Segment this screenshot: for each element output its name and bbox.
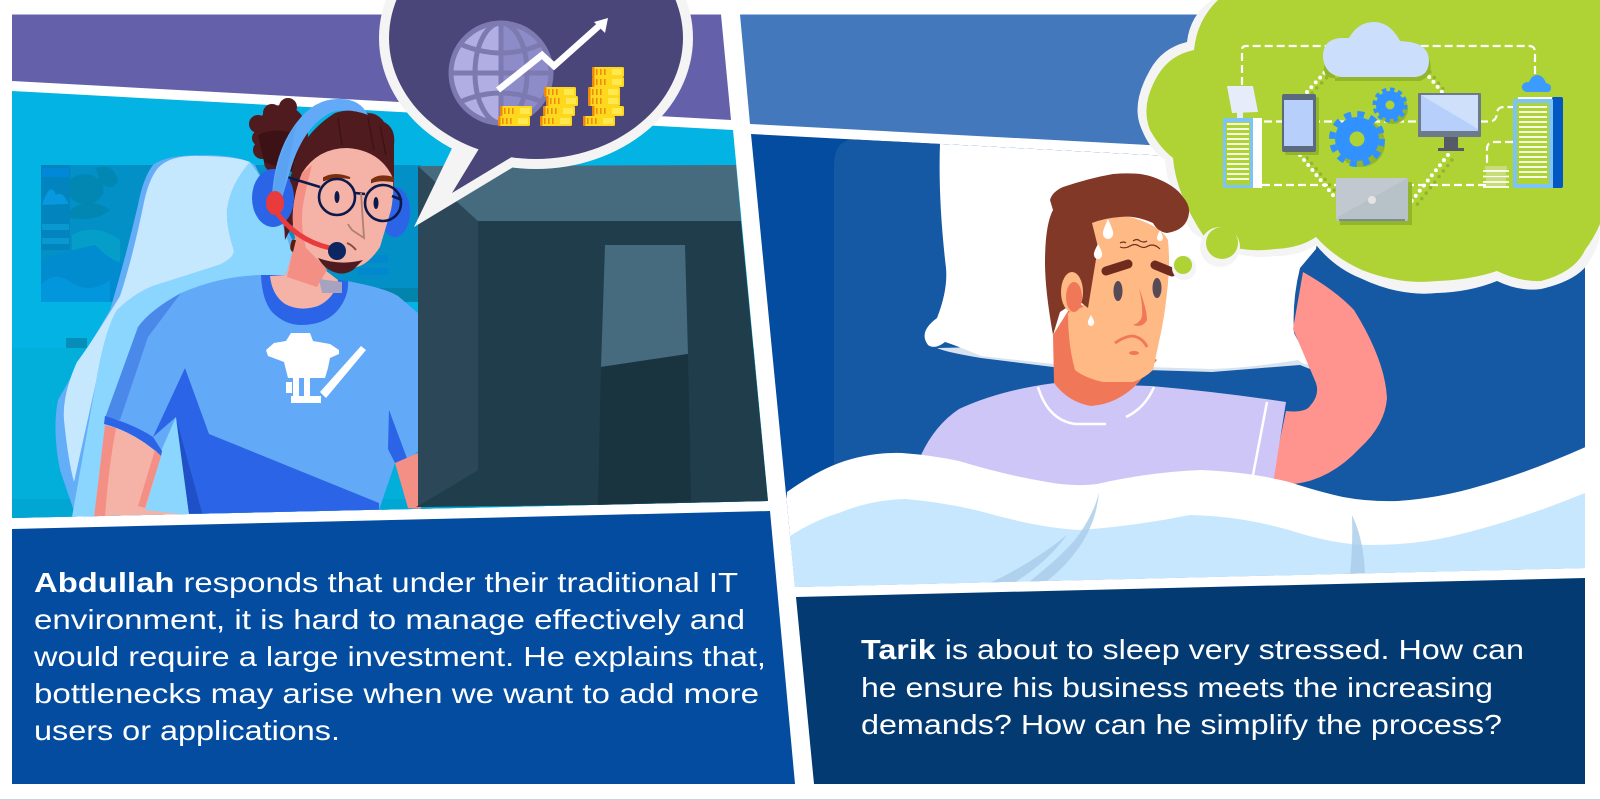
panel: Abdullah caption [12, 511, 795, 784]
icon: left server [1223, 86, 1262, 188]
icon: gears [1332, 90, 1408, 167]
hair [1045, 173, 1189, 335]
text: Tarik caption: demands? How can he simplify the process? [861, 709, 1502, 740]
gaming chair [55, 155, 300, 520]
hair top [283, 110, 394, 240]
blanket [780, 445, 1590, 590]
thought cloud [1138, 0, 1600, 294]
sweat drops [1088, 219, 1163, 326]
panel: top blue band [740, 14, 1300, 153]
icon: globe [450, 22, 552, 124]
Tarik shirt [921, 383, 1286, 490]
hair bun [249, 98, 308, 172]
shirt logo [266, 333, 366, 403]
panel: Tarik scene [745, 130, 1590, 590]
Tarik arm [1272, 272, 1387, 484]
icon: laptop [1336, 178, 1412, 225]
facial features [1106, 240, 1172, 355]
text: Tarik caption: he ensure his business meets the increasing [861, 672, 1493, 703]
headset [252, 99, 368, 260]
icon: paper stack [1483, 166, 1509, 187]
blanket folds [985, 492, 1099, 585]
text: Abdullah caption: Abdullah responds that under their traditional IT [34, 567, 738, 598]
icon: phone [1282, 94, 1319, 155]
icon: big cloud [1323, 22, 1431, 81]
panel: Tarik caption [796, 578, 1585, 784]
text: Abdullah caption: environment, it is hard to manage effectively and [34, 604, 745, 635]
icon: coin stacks [498, 67, 624, 126]
Abdullah body and shirt [94, 275, 421, 518]
glasses and facial features [287, 175, 402, 250]
icon: small blue cloud [1522, 75, 1551, 92]
monitor [416, 165, 768, 507]
icon: monitor [1418, 93, 1481, 151]
icon: right server [1513, 97, 1563, 188]
text: Tarik caption [861, 634, 1524, 740]
speech bubble [379, 0, 693, 227]
text: Abdullah caption: users or applications. [34, 715, 340, 746]
panel: Abdullah scene [0, 80, 780, 520]
panel: top purple band [12, 14, 731, 120]
icon: rising arrow [498, 18, 608, 90]
Abdullah head with headset [249, 98, 410, 325]
network connectors [1242, 46, 1535, 206]
pillow [925, 143, 1330, 372]
text: Abdullah caption: bottlenecks may arise when we want to add more [34, 678, 759, 709]
ear [1061, 272, 1083, 312]
text: Tarik caption: Tarik is about to sleep very stressed. How can [861, 634, 1524, 665]
wall screen [41, 165, 421, 348]
Tarik head [1045, 173, 1189, 406]
text: Abdullah caption: would require a large investment. He explains that, [33, 641, 766, 672]
text: Abdullah caption [33, 567, 766, 746]
thought dots [1172, 227, 1240, 280]
